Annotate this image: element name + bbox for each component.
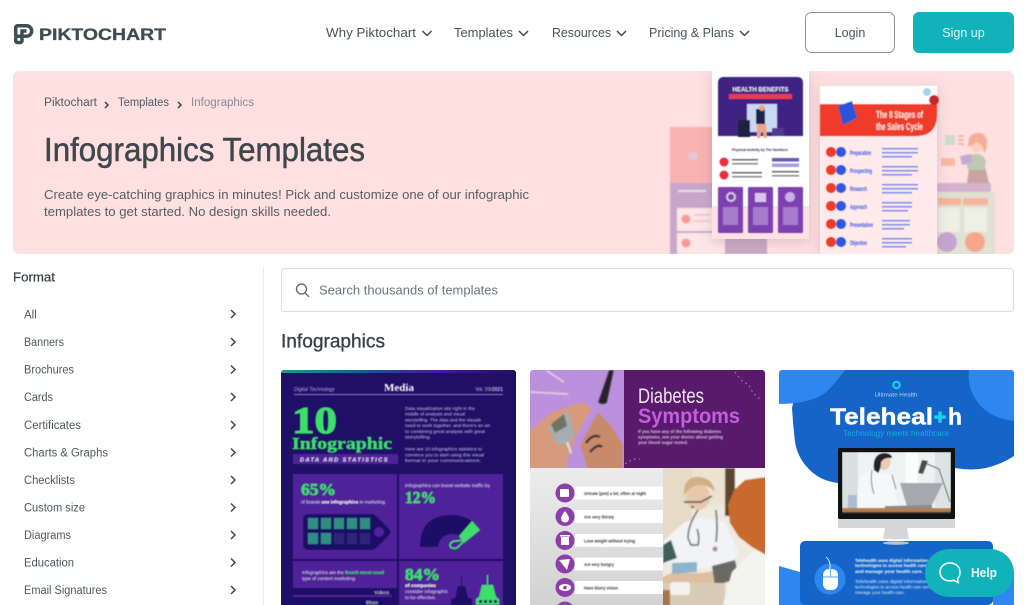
template card: media infographic: Vol. 09/2021 — [475, 387, 503, 393]
template card: media infographic: of companies — [405, 583, 436, 589]
sidebar heading: Format — [13, 270, 56, 284]
template: health benefits: Physical Activity by The Numbers — [732, 147, 789, 152]
template card: media infographic: to be effective. — [405, 595, 436, 601]
nav: why piktochart: Why Piktochart — [326, 25, 416, 40]
stage rows: Objection — [850, 241, 867, 247]
login button — [806, 12, 894, 52]
intro text: convince you to start using this visual — [405, 452, 484, 458]
breadcrumb — [44, 97, 254, 109]
sign up button — [913, 12, 1014, 53]
help button — [925, 549, 1014, 597]
intro text: middle of analysis and visual — [405, 412, 465, 418]
info panel text: manage your health care. — [855, 590, 905, 595]
intro text: Here are 10 infographics statistics to — [405, 446, 482, 452]
template: sales cycle — [820, 86, 939, 254]
info panel text: Telehealth uses digital information and — [855, 579, 938, 584]
logo mark — [893, 382, 900, 388]
intro text — [405, 406, 491, 464]
symptom list: Are very hungry — [584, 562, 614, 567]
template card: media infographic: Infographics are the fourth most-used — [302, 570, 384, 576]
title: Teleheal — [830, 404, 933, 430]
stat panels — [293, 474, 397, 559]
building pictograms — [451, 575, 472, 605]
symptom list: Have blurry vision — [584, 586, 618, 590]
hero banner — [13, 71, 1014, 254]
template card: media infographic: 65% — [301, 480, 336, 499]
template card: media infographic: Infographic — [292, 434, 393, 453]
template card: media infographic: Media — [384, 382, 414, 394]
template card: media infographic: of brands use infographics in marketing. — [301, 500, 386, 506]
breadcrumb: Templates — [118, 97, 169, 109]
intro text: Data visualization sits right in the — [405, 406, 475, 412]
faded template left — [670, 127, 767, 254]
symptom list: Urinate (pee) a lot, often at night — [584, 491, 646, 496]
sidebar list: Checklists — [24, 475, 75, 487]
sidebar list — [24, 310, 235, 597]
stage rows: Approach — [850, 205, 867, 211]
template: health benefits: HEALTH BENEFITS — [732, 88, 788, 94]
sidebar list: Banners — [24, 337, 64, 349]
photo: glucose meter — [530, 370, 624, 468]
template: health benefits — [712, 71, 809, 239]
intro text: format in your communications: — [405, 458, 481, 464]
stage rows: Prospecting — [850, 169, 872, 175]
template card: diabetes symptoms: your blood sugar tested. — [638, 440, 688, 445]
blue blobs — [792, 370, 1014, 483]
stage rows: Research — [850, 187, 867, 193]
template card: media infographic: 84% — [405, 565, 440, 584]
stage rows — [826, 147, 918, 248]
sidebar list: Diagrams — [24, 530, 71, 542]
gauge chart — [420, 515, 472, 547]
info panel text: Telehealth uses digital information and — [855, 558, 937, 563]
sidebar list: Education — [24, 558, 74, 570]
header navigation — [16, 12, 1014, 53]
sidebar list: Cards — [24, 392, 53, 404]
icon: computer mouse — [814, 557, 846, 594]
template card: media infographic: Infographics can boost website traffic by — [405, 483, 491, 489]
sidebar: format filter — [13, 270, 235, 597]
symptom list — [556, 484, 663, 605]
intro text: storytelling. — [405, 434, 431, 440]
template card: telehealth: h — [948, 404, 962, 430]
template card: media infographic: DATA AND STATISTICS — [300, 458, 389, 464]
hero description: Create eye-catching graphics in minutes! Pick and customize one of our infographic — [44, 187, 530, 202]
icon: magnifier — [296, 284, 309, 297]
login button: Login — [835, 26, 865, 40]
nav: pricing and plans: Pricing & Plans — [649, 25, 734, 40]
info panel text: technologies to access health care services — [855, 563, 945, 568]
template: sales cycle: the Sales Cycle — [876, 122, 923, 133]
hero template collage — [670, 71, 995, 254]
template card: media infographic: 12% — [405, 488, 436, 507]
sidebar list: Brochures — [24, 364, 74, 376]
template card: diabetes symptoms: Symptoms — [638, 404, 740, 428]
sidebar list: Custom size — [24, 502, 85, 514]
template card: media infographic: Digital Technology — [294, 387, 335, 393]
sidebar list: Email Signatures — [24, 585, 107, 597]
logo: PIKTOCHART — [39, 26, 166, 44]
template card: media infographic: Videos — [374, 590, 390, 596]
tag pictogram — [303, 514, 390, 550]
info panel text: and manage your health care. — [855, 569, 923, 574]
stage rows: Presentation — [850, 223, 873, 229]
hero title: Infographics Templates — [44, 131, 365, 168]
symptom list: Lose weight without trying — [584, 538, 635, 544]
sidebar list: All — [24, 310, 37, 322]
faded template right — [937, 133, 995, 254]
info panel text — [854, 558, 931, 596]
template card: media infographic: type of content marketing. — [302, 576, 356, 582]
stage rows: Preparation — [850, 151, 871, 157]
template card: diabetes symptoms: symptoms, see your doctor about getting — [638, 434, 723, 440]
template card: telehealth: Ultimate Health — [874, 392, 918, 398]
hero description: templates to get started. No design skills needed. — [44, 204, 331, 219]
intro text: storytelling. The data and the visuals — [405, 418, 482, 424]
template card: diabetes symptoms — [525, 365, 768, 605]
big number: 10 — [292, 400, 337, 442]
icon: speech bubble — [940, 563, 960, 582]
sidebar list: Charts & Graphs — [24, 448, 108, 460]
section heading: Infographics — [281, 332, 385, 352]
sidebar list: Certificates — [24, 420, 81, 432]
search box — [282, 268, 1014, 312]
nav: resources: Resources — [552, 25, 611, 40]
template card: telehealth: Technology meets healthcare — [843, 429, 950, 438]
breadcrumb: Infographics — [191, 97, 254, 109]
template card: media infographic: consider infographic — [405, 589, 449, 595]
breadcrumb: Piktochart — [44, 97, 98, 109]
symptom list: Are very thirsty — [584, 514, 614, 520]
info panel text: technologies to access health care services and — [855, 584, 947, 590]
template card: diabetes symptoms: If you have any of the following diabetes — [638, 429, 722, 434]
search box: Search thousands of templates — [319, 284, 498, 298]
monitor with doctor photo — [838, 448, 955, 545]
template card: diabetes symptoms: Diabetes — [638, 384, 704, 408]
help button: Help — [971, 565, 997, 580]
template card: media infographic — [281, 370, 516, 605]
sign up button: Sign up — [942, 26, 985, 40]
template: sales cycle: The 8 Stages of — [876, 110, 923, 121]
intro text: need to work together, and there's an art — [405, 423, 491, 429]
photo: doctor with patient — [660, 465, 768, 605]
intro text: to combining great analysis with great — [405, 429, 486, 435]
template card: telehealth — [779, 370, 1014, 605]
hero description — [44, 187, 530, 219]
nav: templates: Templates — [454, 25, 513, 40]
